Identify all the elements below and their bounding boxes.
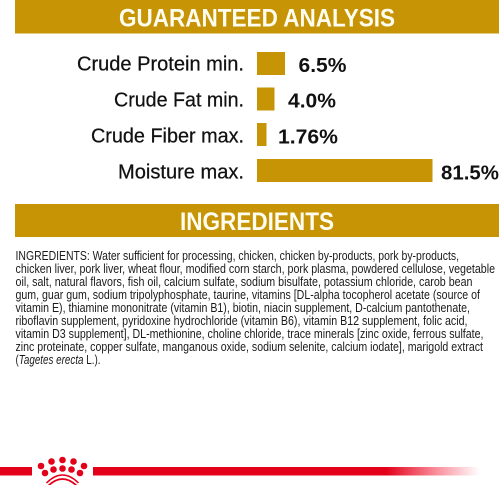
bar chart: guaranteed analysis values [77, 52, 499, 184]
row: crude fat [114, 88, 336, 113]
heading: ingredients: INGREDIENTS [180, 208, 334, 236]
row: crude fat: Crude Fat min. [114, 90, 244, 112]
footer band: right segment fading out [93, 467, 500, 476]
row: crude fiber: Crude Fiber max. [91, 126, 244, 148]
text block: ingredients list: (Tagetes erecta L.). [16, 352, 100, 367]
heading: guaranteed analysis: GUARANTEED ANALYSIS [119, 5, 395, 33]
row: crude fat: 4.0% [288, 90, 336, 113]
icon: royal canin crown logo [38, 457, 87, 485]
row: crude fiber [91, 123, 338, 148]
row: crude fiber: 1.76% [278, 125, 338, 148]
text block: ingredients list [16, 248, 495, 367]
row: moisture: 81.5% [441, 161, 499, 184]
footer band: left segment [0, 467, 32, 476]
row: crude protein: Crude Protein min. [77, 54, 244, 76]
row: crude protein: 6.5% [298, 54, 346, 77]
row: moisture [118, 159, 499, 184]
panel: guaranteed analysis header [15, 0, 499, 34]
row: crude protein [77, 52, 346, 77]
panel: ingredients header [15, 204, 499, 237]
row: moisture: Moisture max. [118, 162, 244, 184]
